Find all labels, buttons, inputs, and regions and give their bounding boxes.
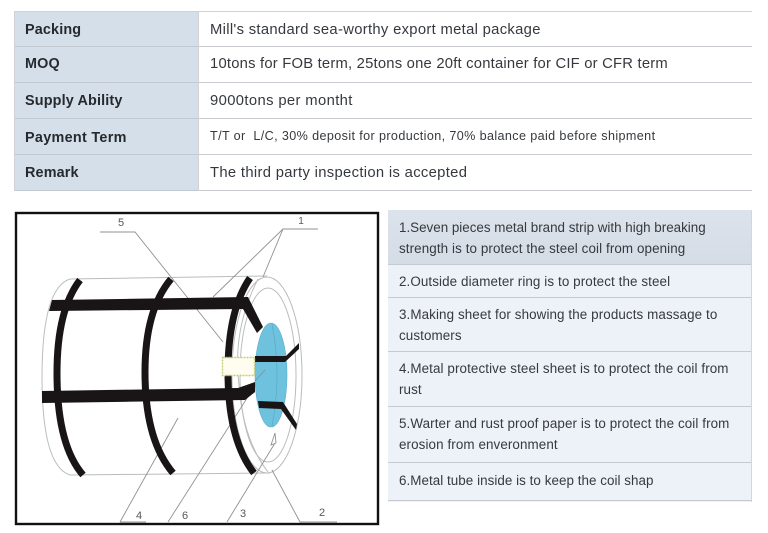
diagram frame (16, 213, 378, 524)
legend item 6 (388, 463, 751, 501)
legend item 3: customers (399, 328, 462, 343)
part numbers (118, 216, 325, 522)
row label: Supply Ability: Supply Ability (25, 93, 123, 109)
legend item 1: strength is to protect the steel coil from opening (399, 241, 685, 256)
legend item 3: 3.Making sheet for showing the products massage to (399, 307, 717, 322)
row value: Payment Term: T/T or L/C, 30% deposit for production, 70% balance paid before shipment (210, 129, 655, 143)
row value: Remark (198, 155, 752, 191)
part numbers: 4 (136, 510, 142, 522)
row value: Packing: Mill's standard sea-worthy export metal package (210, 22, 541, 38)
coil body outline (42, 276, 302, 475)
legend item 2 (388, 265, 751, 298)
part numbers: 6 (182, 510, 188, 522)
product label sheet (222, 358, 254, 376)
legend item 5: 5.Warter and rust proof paper is to protect the coil from (399, 416, 729, 431)
row value: Supply Ability: 9000tons per montht (210, 93, 353, 109)
row value: MOQ: 10tons for FOB term, 25tons one 20ft container for CIF or CFR term (210, 56, 668, 72)
leader lines (100, 229, 337, 522)
black circumferential straps (57, 278, 254, 475)
row label: Supply Ability (15, 83, 198, 119)
legend item 4: 4.Metal protective steel sheet is to protect the coil from (399, 361, 729, 376)
legend item 6: 6.Metal tube inside is to keep the coil shap (399, 473, 654, 488)
row label: Payment Term (15, 119, 198, 155)
part numbers: 2 (319, 507, 325, 519)
part numbers: 3 (240, 508, 246, 520)
row label: MOQ: MOQ (25, 56, 60, 72)
row label: Remark: Remark (25, 165, 79, 181)
row label: Packing: Packing (25, 22, 81, 38)
row label: MOQ (15, 47, 198, 83)
legend item 4: rust (399, 382, 422, 397)
blue coil eye (255, 323, 287, 427)
row label: Packing (15, 12, 198, 47)
row value: MOQ (198, 47, 752, 83)
panel: packing specification table (14, 11, 752, 191)
panel: legend of packing parts (388, 210, 752, 502)
part numbers: 1 (298, 216, 304, 227)
legend item 3 (388, 298, 751, 352)
legend item 2: 2.Outside diameter ring is to protect the steel (399, 274, 670, 289)
legend item 1: 1.Seven pieces metal brand strip with high breaking (399, 220, 706, 235)
legend item 5 (388, 407, 751, 463)
row value: Packing (198, 12, 752, 47)
row value: Remark: The third party inspection is accepted (210, 165, 467, 181)
row value: Payment Term (198, 119, 752, 155)
row value: Supply Ability (198, 83, 752, 119)
black longitudinal straps (42, 297, 299, 430)
row label: Payment Term: Payment Term (25, 130, 127, 146)
legend item 1 (388, 210, 751, 265)
diagram: steel coil packaging (14, 212, 380, 526)
part numbers: 5 (118, 217, 124, 229)
row label: Remark (15, 155, 198, 191)
legend item 5: erosion from enveronment (399, 437, 558, 452)
legend item 4 (388, 352, 751, 407)
